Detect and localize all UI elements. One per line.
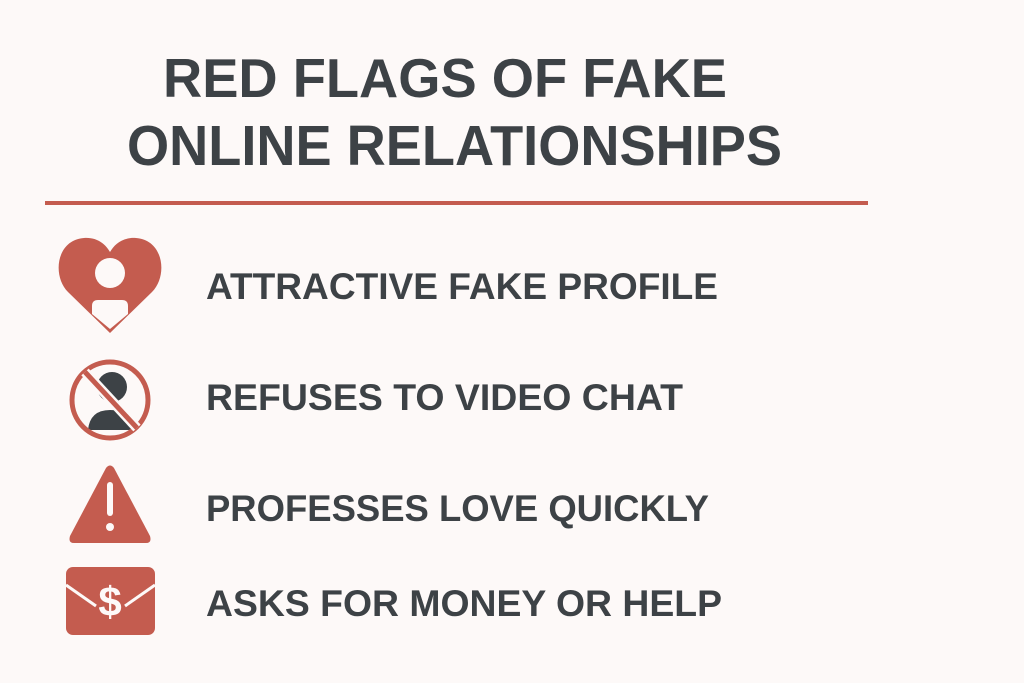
icon: heart with person xyxy=(59,238,161,333)
label: PROFESSES LOVE QUICKLY xyxy=(206,488,709,529)
label: ATTRACTIVE FAKE PROFILE xyxy=(206,266,718,307)
icon: no person xyxy=(72,362,148,438)
item: attractive fake profile xyxy=(59,238,718,333)
item: professes love quickly xyxy=(70,466,709,543)
icon: warning triangle xyxy=(70,466,150,543)
icon: envelope with dollar: $ xyxy=(98,578,122,625)
label: REFUSES TO VIDEO CHAT xyxy=(206,377,683,418)
icon: envelope with dollar xyxy=(66,567,155,635)
item: asks for money xyxy=(66,567,722,635)
title xyxy=(127,47,782,178)
label: ASKS FOR MONEY OR HELP xyxy=(206,583,722,624)
title: RED FLAGS OF FAKE xyxy=(163,47,727,109)
title: ONLINE RELATIONSHIPS xyxy=(127,114,782,178)
item: refuses to video chat xyxy=(72,362,683,438)
